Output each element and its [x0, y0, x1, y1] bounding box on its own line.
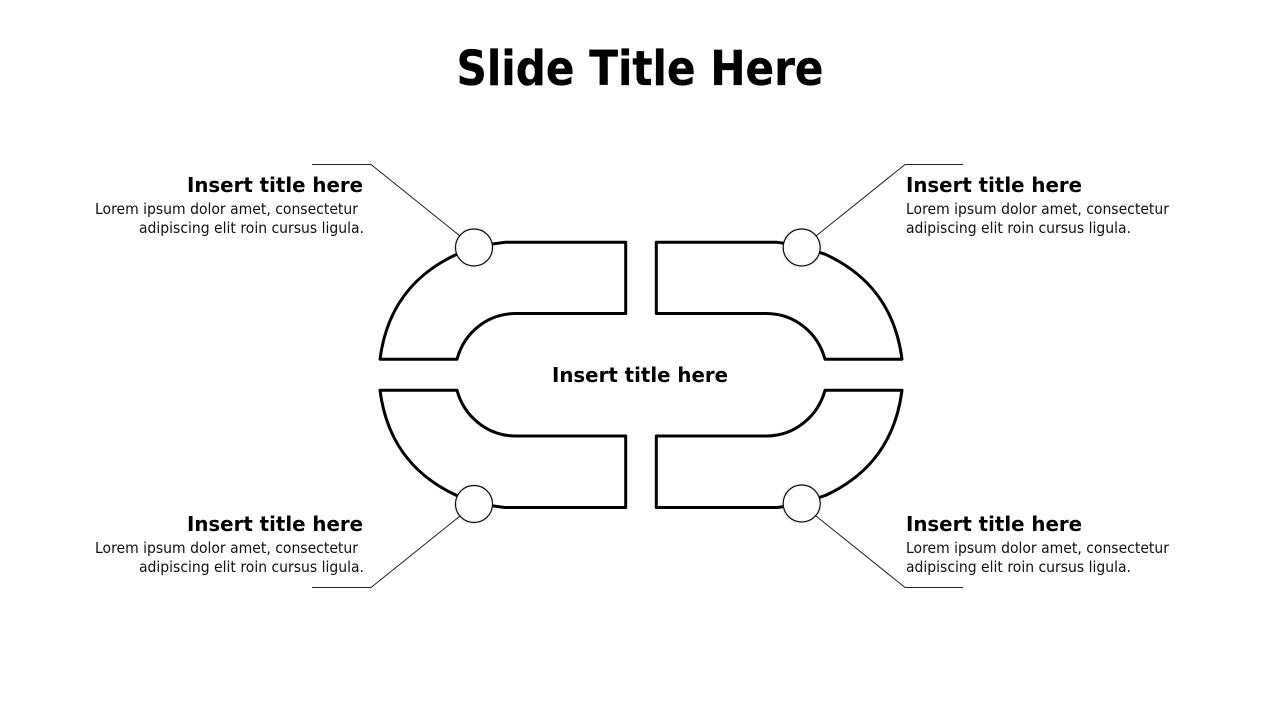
text block: bottom left: Insert title here	[187, 512, 363, 536]
text block: bottom left: adipiscing elit roin cursus ligula.	[139, 558, 364, 576]
text block: top left: Lorem ipsum dolor amet, consectetur	[95, 200, 359, 218]
text block: top right	[906, 173, 1170, 237]
text block: bottom right: Insert title here	[906, 512, 1082, 536]
marker: top right	[783, 229, 820, 266]
text block: bottom right: Lorem ipsum dolor amet, consectetur	[906, 539, 1170, 557]
text block: bottom left	[95, 512, 364, 576]
segment: bottom left	[380, 390, 626, 508]
text block: top left	[95, 173, 364, 237]
marker: top left	[456, 229, 492, 266]
text block: bottom right: adipiscing elit roin cursus ligula.	[906, 558, 1131, 576]
text block: top left: Insert title here	[187, 173, 363, 197]
center heading: Insert title here	[552, 363, 728, 387]
text block: top left: adipiscing elit roin cursus ligula.	[139, 219, 364, 237]
text block: bottom right	[906, 512, 1170, 576]
marker: bottom left	[456, 486, 492, 522]
leader line: bottom left	[312, 516, 460, 588]
leader line: top right	[816, 164, 963, 236]
segment: top left	[380, 242, 626, 359]
segment: top right	[656, 242, 902, 359]
title: Slide Title Here	[456, 41, 824, 97]
segment: bottom right	[656, 390, 902, 508]
text block: top right: Insert title here	[906, 173, 1082, 197]
marker: bottom right	[783, 485, 820, 522]
leader line: top left	[312, 164, 460, 236]
text block: top right: adipiscing elit roin cursus ligula.	[906, 219, 1131, 237]
text block: bottom left: Lorem ipsum dolor amet, consectetur	[95, 539, 359, 557]
text block: top right: Lorem ipsum dolor amet, consectetur	[906, 200, 1170, 218]
leader line: bottom right	[816, 516, 963, 588]
